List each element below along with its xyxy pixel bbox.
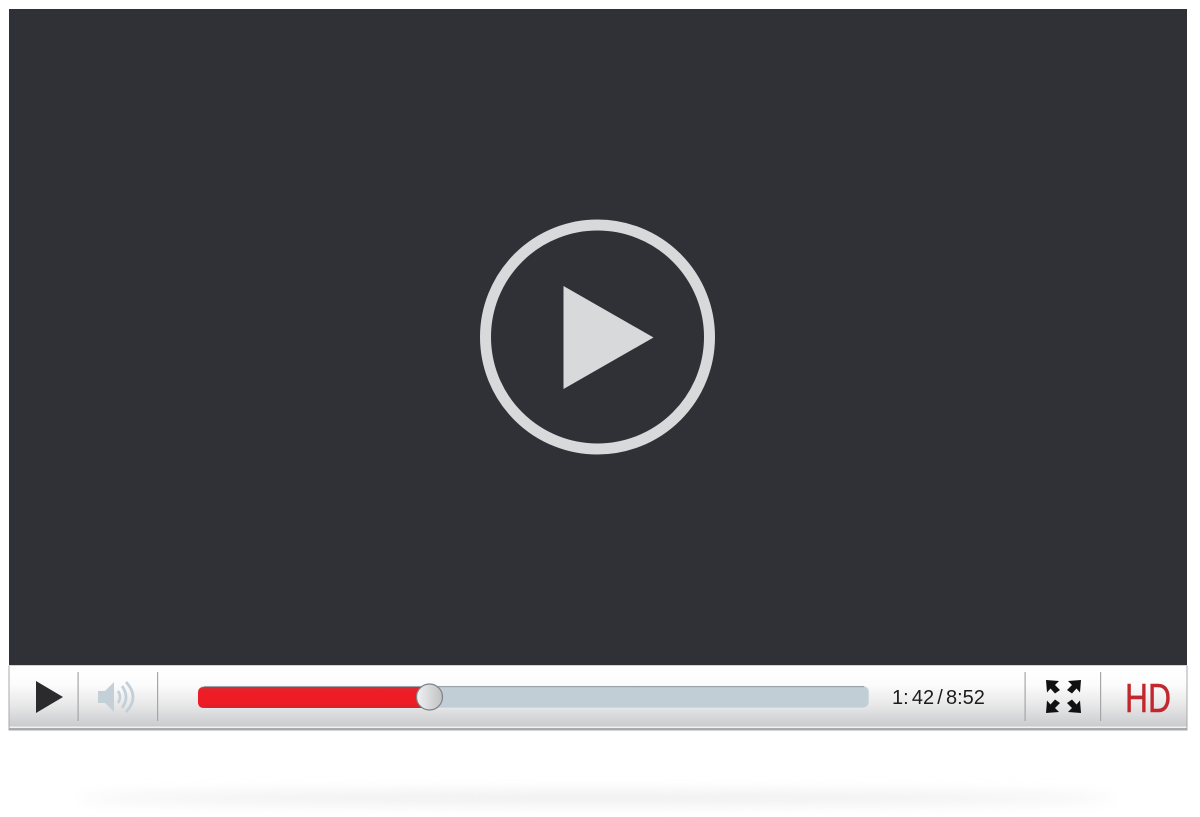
progress track (198, 686, 869, 708)
divider (1024, 672, 1026, 721)
control bar (8, 666, 1188, 730)
play triangle (564, 286, 654, 389)
play button icon (36, 681, 63, 713)
progress fill (198, 687, 430, 708)
divider (157, 672, 158, 721)
divider (78, 672, 79, 721)
speaker icon (98, 682, 133, 712)
progress knob (416, 684, 442, 710)
fullscreen icon (1046, 680, 1081, 713)
HD label: HD (1125, 675, 1171, 721)
big play button (486, 225, 710, 449)
time readout: 1: 42 / 8:52 (892, 687, 985, 709)
divider (1100, 672, 1101, 721)
play ring (486, 225, 710, 449)
video screen (9, 9, 1187, 665)
floor shadow (77, 792, 1117, 804)
